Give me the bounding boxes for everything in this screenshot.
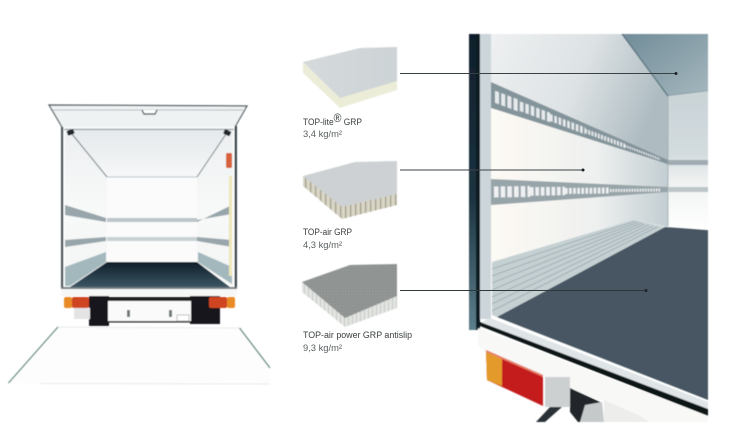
cargo box interior [62, 126, 236, 288]
upper lashing rail [491, 82, 708, 165]
label: TOP-lite GRP: ® [334, 111, 342, 125]
door post [469, 34, 491, 330]
side wall [491, 34, 668, 262]
box frame [61, 126, 237, 296]
lower lashing rail [491, 179, 708, 205]
leader line: wall [400, 168, 584, 172]
label: TOP-air power GRP antislip: 9,3 kg/m² [303, 343, 343, 354]
truck rear view with open cargo box [8, 105, 270, 384]
kick plate [492, 220, 665, 317]
tail lift platform [8, 327, 270, 384]
bumper and sill [480, 318, 708, 410]
label: TOP-lite GRP [303, 111, 362, 140]
ceiling panel [622, 34, 708, 96]
label: TOP-lite GRP: GRP [341, 117, 362, 128]
chassis and tail lights [64, 296, 235, 326]
label: TOP-air GRP: 4,3 kg/m² [303, 240, 343, 251]
leader line: ceiling [400, 72, 678, 75]
material sample: TOP-air power GRP antislip [302, 264, 397, 327]
label: TOP-air power GRP antislip [303, 330, 412, 354]
label: TOP-lite GRP: 3,4 kg/m² [303, 129, 343, 140]
label: TOP-air power GRP antislip: TOP-air power GRP antislip [303, 330, 412, 341]
leader line: floor [400, 289, 648, 292]
raised rear door [49, 105, 247, 136]
floor [497, 227, 708, 400]
label: TOP-lite GRP: TOP-lite [303, 117, 338, 128]
material sample: TOP-air GRP [303, 161, 397, 219]
label: TOP-air GRP [303, 227, 352, 251]
material sample: TOP-lite GRP [303, 47, 397, 108]
back wall [668, 91, 708, 230]
tail light [486, 350, 543, 406]
chassis parts [536, 377, 650, 422]
label: TOP-air GRP: TOP-air GRP [303, 227, 352, 238]
truck interior close-up [469, 34, 708, 422]
